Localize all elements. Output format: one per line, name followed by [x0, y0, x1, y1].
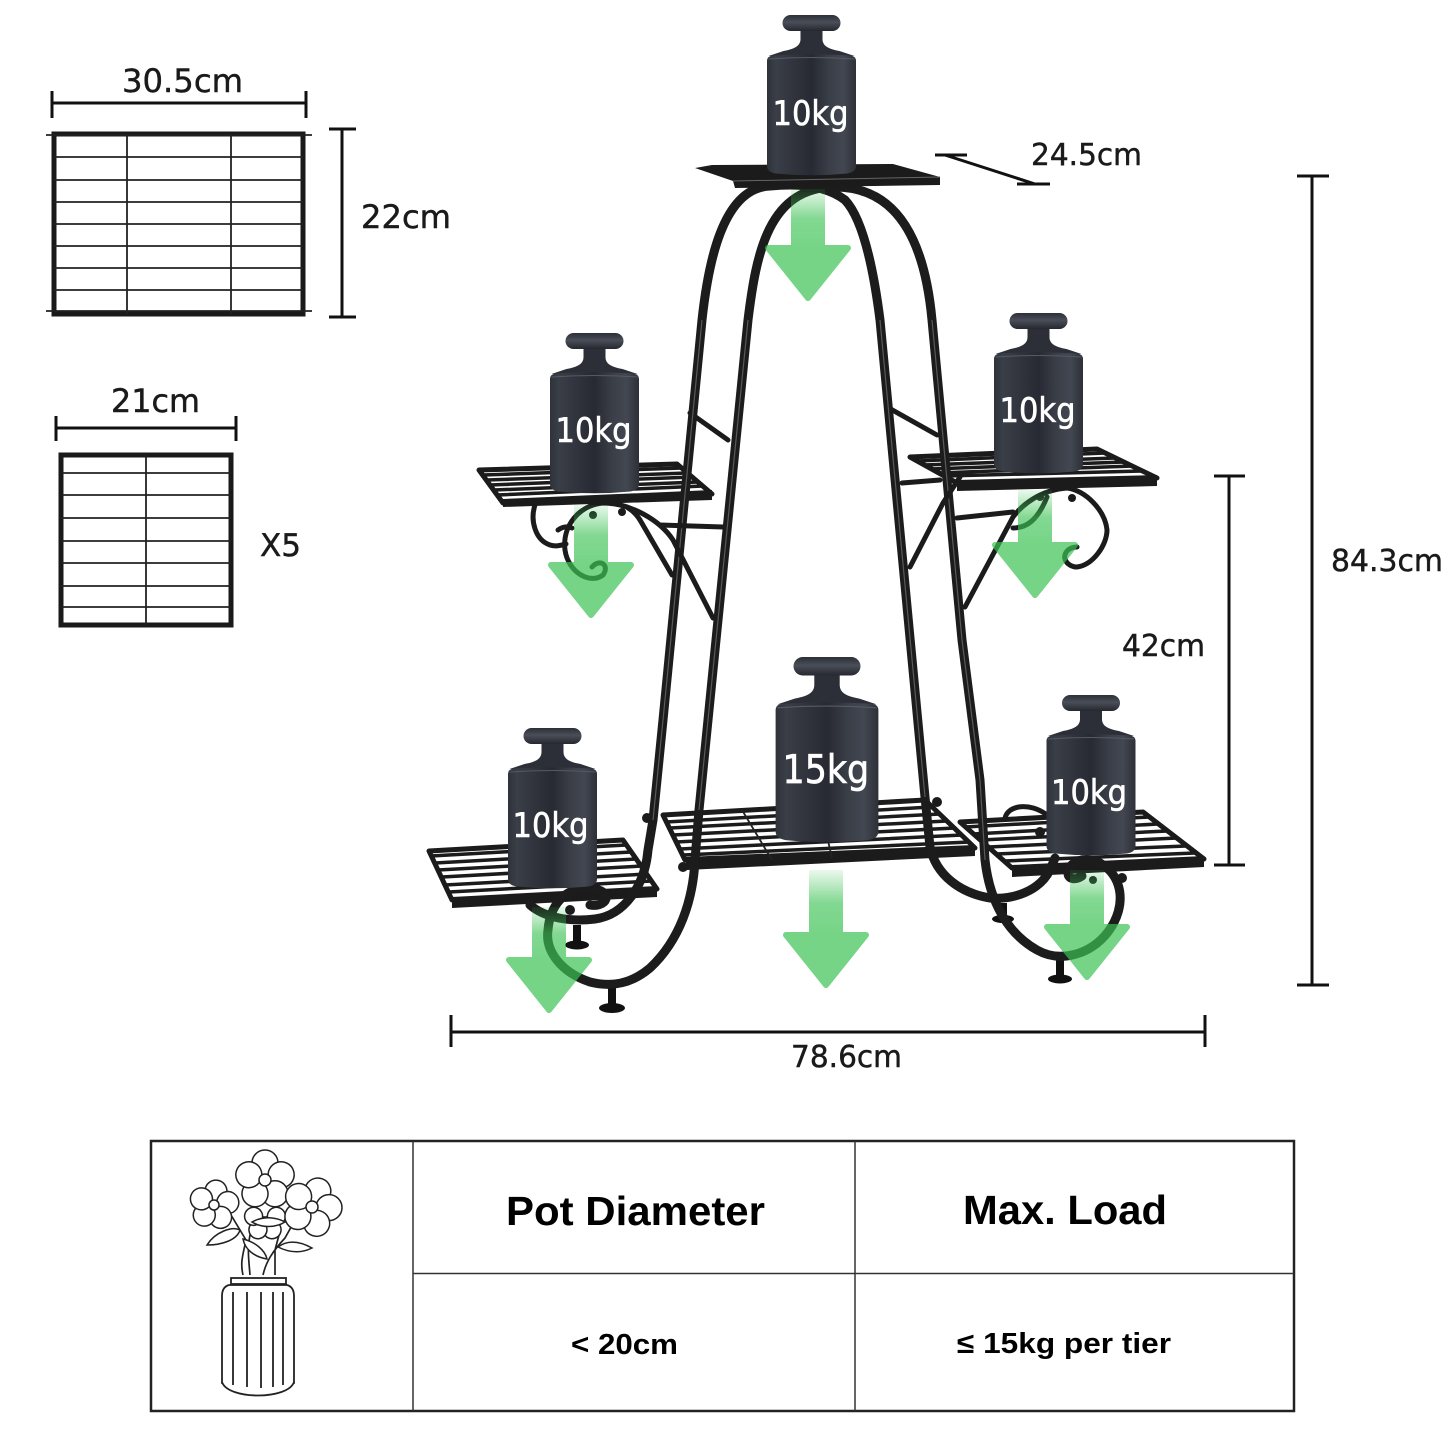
weight: upper right 10kg: [994, 313, 1083, 473]
dimension: 42cm tier height: [1122, 476, 1245, 865]
scrolls and bolts: lower tier: [565, 797, 1127, 915]
small shelf top view: [61, 455, 231, 625]
arrow: centre: [786, 870, 866, 985]
icon: flowers in vase: [187, 1150, 342, 1396]
table value: max load: ≤ 15kg per tier: [957, 1328, 1171, 1360]
scrolls: upper right: [902, 477, 1107, 607]
shelf: upper right: [910, 449, 1157, 491]
weight: top 10kg: [767, 15, 856, 175]
label: X5: X5: [260, 528, 301, 564]
dimension: 78.6cm width: 78.6cm: [791, 1040, 902, 1075]
dimension: 22cm: [329, 129, 451, 317]
shelf: upper left: [479, 464, 712, 507]
dimension: 22cm: 22cm: [361, 198, 451, 236]
arrow: top: [768, 189, 848, 298]
right flower: [280, 1174, 342, 1239]
dimension: 24.5cm depth: 24.5cm: [1031, 138, 1142, 173]
table heading: Pot Diameter: Pot Diameter: [506, 1188, 765, 1234]
main tube one: [548, 187, 1120, 984]
vase: [222, 1278, 294, 1396]
arrow: lower right: [1047, 870, 1127, 977]
weight: lower right 10kg: [1046, 695, 1136, 855]
feet: [565, 903, 1072, 1013]
shelf: lower right: [960, 812, 1204, 877]
back flower: [242, 1199, 288, 1242]
arrow: upper right: [995, 490, 1075, 595]
weight: upper left 10kg: [550, 333, 639, 493]
weight: upper left 10kg: 10kg: [556, 411, 632, 451]
specification table: [151, 1141, 1294, 1411]
dimension: 24.5cm depth: [935, 138, 1142, 184]
weight: lower right 10kg: 10kg: [1051, 773, 1127, 813]
table value: pot diameter: < 20cm: [571, 1329, 678, 1361]
leaves: [207, 1229, 312, 1259]
dimension: 78.6cm width: [451, 1015, 1205, 1075]
dimension: 84.3cm height: 84.3cm: [1331, 544, 1443, 579]
arrow: lower left: [509, 907, 589, 1010]
cross struts: [690, 407, 937, 440]
dimension: 42cm tier height: 42cm: [1122, 629, 1205, 664]
weight: top 10kg: 10kg: [772, 94, 848, 134]
dimension: 84.3cm height: [1297, 176, 1443, 985]
scrolls: upper left: [533, 503, 723, 618]
shelf: top: [695, 164, 940, 188]
dimension: 30.5cm: [52, 62, 306, 118]
weight: centre 15kg: 15kg: [783, 748, 869, 793]
weight: lower left 10kg: 10kg: [512, 806, 588, 846]
weight: centre 15kg: [776, 657, 878, 842]
arrow: upper left: [551, 505, 631, 615]
weight: upper right 10kg: 10kg: [1000, 391, 1076, 431]
upper leaf: [252, 1218, 285, 1226]
main tube two: [530, 185, 1055, 920]
plant stand frame: [429, 164, 1204, 1013]
dimension: 21cm: [56, 382, 236, 441]
top flower: [232, 1150, 298, 1212]
shelf: lower centre: [663, 800, 975, 870]
dimension: 21cm: 21cm: [111, 382, 200, 420]
dimension: 30.5cm: 30.5cm: [122, 62, 243, 100]
large shelf top view: [46, 134, 312, 314]
weight: lower left 10kg: [508, 728, 597, 888]
left flower: [187, 1179, 241, 1232]
shelf: lower left: [429, 840, 657, 908]
table heading: Max. Load: Max. Load: [963, 1187, 1167, 1233]
